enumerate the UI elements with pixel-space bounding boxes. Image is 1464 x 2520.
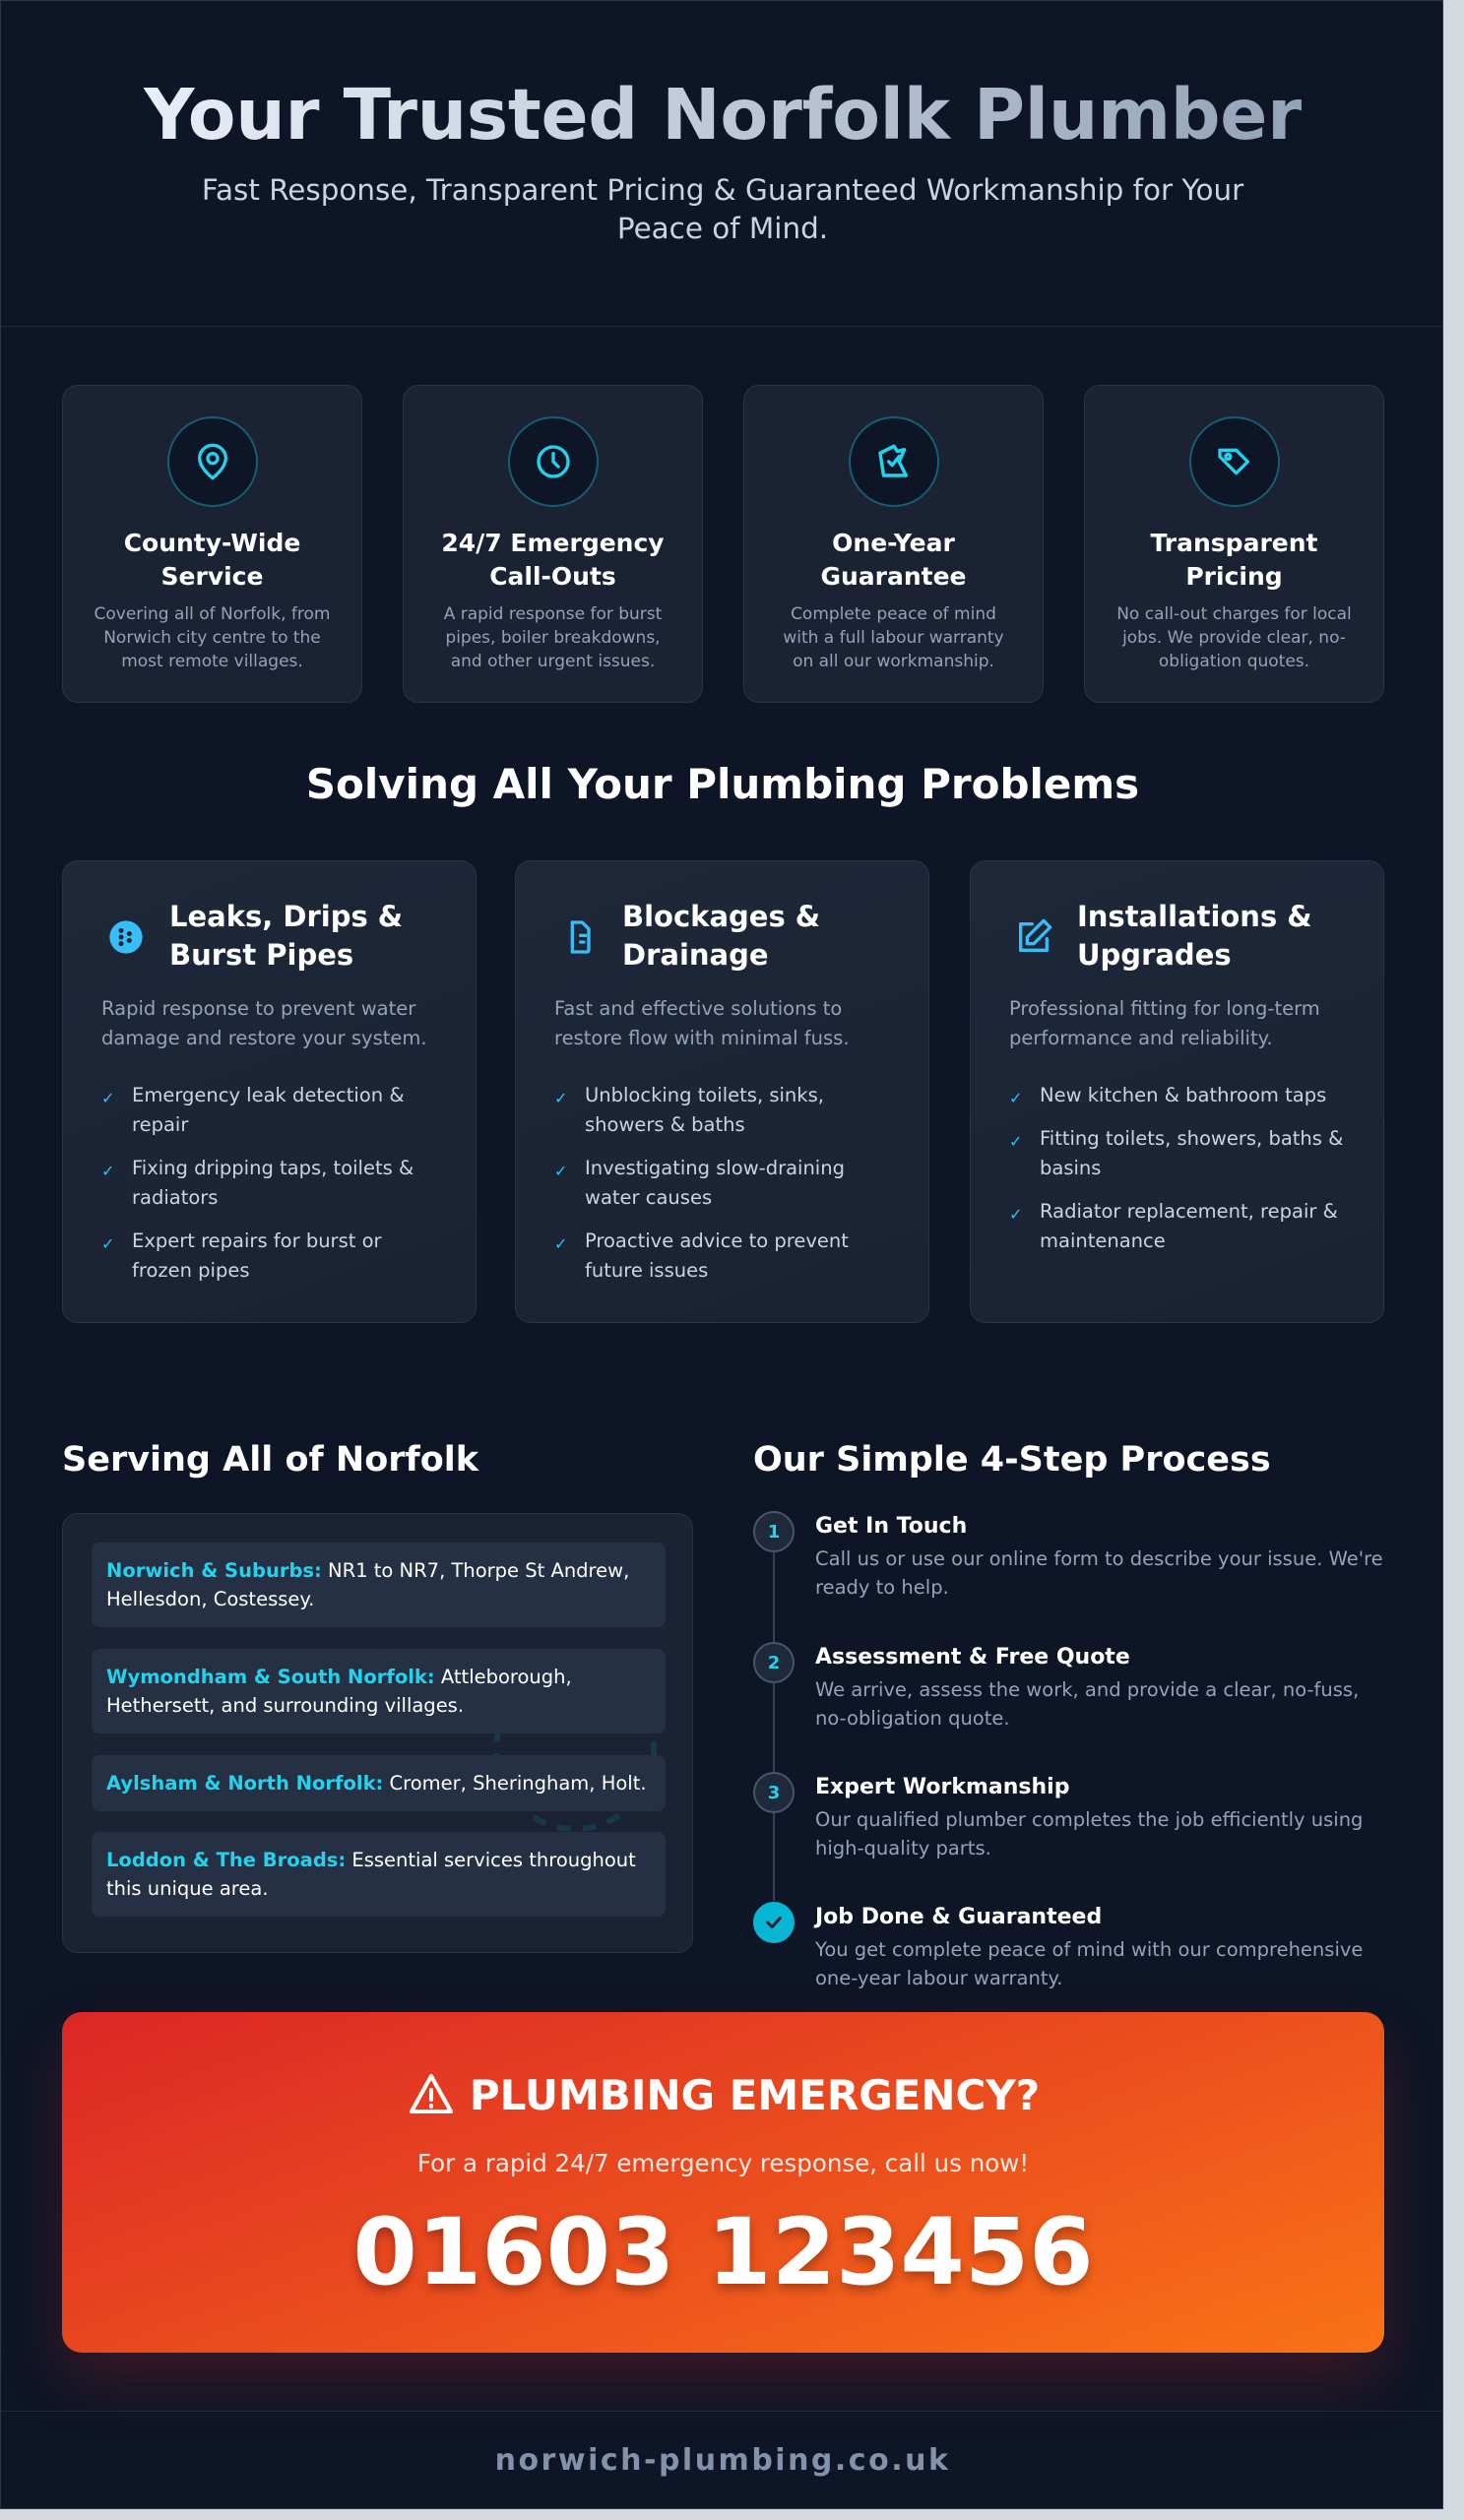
panel: blockages: Unblocking toilets, sinks, showers & baths bbox=[585, 1084, 824, 1136]
text: Job Done & Guaranteed bbox=[815, 1905, 1102, 1929]
area: wymondham: Wymondham & South Norfolk: Attleborough, Hethersett, and surrounding villages. bbox=[106, 1666, 572, 1717]
icon: tag bbox=[1189, 416, 1280, 507]
feature card: county-wide: County-Wide Service bbox=[124, 529, 300, 591]
text: You get complete peace of mind with our comprehensive one-year labour warranty. bbox=[815, 1938, 1363, 1989]
panel: installations: Installations & Upgrades bbox=[1077, 900, 1312, 972]
icon: leak bbox=[109, 920, 143, 954]
step 2 bbox=[753, 1642, 795, 1683]
emergency banner bbox=[62, 2012, 1384, 2353]
icon: edit bbox=[1019, 919, 1051, 952]
step 3: 3 bbox=[768, 1782, 780, 1803]
section heading: problems: Solving All Your Plumbing Problems bbox=[306, 760, 1139, 808]
panel: leaks bbox=[62, 860, 477, 1323]
feature card: guarantee bbox=[743, 385, 1044, 703]
step 3 bbox=[753, 1772, 795, 1813]
feature card: county-wide: Covering all of Norfolk, from Norwich city centre to the most remote villages. bbox=[95, 604, 330, 671]
feature card: guarantee: One-Year Guarantee bbox=[820, 529, 967, 591]
panel: installations bbox=[970, 860, 1384, 1323]
step 4 bbox=[753, 1902, 795, 1943]
subtitle: Fast Response, Transparent Pricing & Guaranteed Workmanship for Your Peace of Mind. bbox=[202, 173, 1243, 245]
panel: leaks: Expert repairs for burst or frozen pipes bbox=[132, 1229, 382, 1282]
heading: process: Our Simple 4-Step Process bbox=[753, 1440, 1271, 1480]
feature card: pricing bbox=[1084, 385, 1384, 703]
icon: document bbox=[571, 920, 591, 954]
phone number: 01603 123456 bbox=[352, 2199, 1094, 2306]
feature card: county-wide bbox=[62, 385, 362, 703]
heading with warning icon: PLUMBING EMERGENCY? bbox=[470, 2071, 1040, 2119]
panel: blockages bbox=[515, 860, 929, 1323]
panel: leaks: Emergency leak detection & repair bbox=[132, 1084, 405, 1136]
sub text: For a rapid 24/7 emergency response, call us now! bbox=[417, 2149, 1029, 2177]
panel: blockages: Investigating slow-draining water causes bbox=[585, 1157, 845, 1209]
panel: installations: Professional fitting for long-term performance and reliability. bbox=[1009, 997, 1320, 1049]
text: Expert Workmanship bbox=[815, 1775, 1069, 1799]
panel: installations: New kitchen & bathroom taps bbox=[1040, 1084, 1326, 1106]
area: norwich: Norwich & Suburbs: NR1 to NR7, Thorpe St Andrew, Hellesdon, Costessey. bbox=[106, 1559, 629, 1610]
feature card: guarantee: Complete peace of mind with a full labour warranty on all our workmanship. bbox=[783, 604, 1004, 671]
panel: blockages: Proactive advice to prevent future issues bbox=[585, 1229, 849, 1282]
text: Call us or use our online form to describe your issue. We're ready to help. bbox=[815, 1547, 1383, 1599]
panel: blockages: Blockages & Drainage bbox=[622, 900, 820, 972]
text: Our qualified plumber completes the job efficiently using high-quality parts. bbox=[815, 1808, 1363, 1859]
text: Get In Touch bbox=[815, 1514, 967, 1539]
panel: leaks: Rapid response to prevent water damage and restore your system. bbox=[101, 997, 427, 1049]
panel: leaks: Leaks, Drips & Burst Pipes bbox=[169, 900, 403, 972]
icon: badge check bbox=[849, 416, 939, 507]
area: norwich bbox=[92, 1543, 666, 1627]
area: loddon bbox=[92, 1832, 666, 1917]
step 1: 1 bbox=[768, 1522, 780, 1542]
title: Your Trusted Norfolk Plumber bbox=[144, 74, 1302, 156]
area: loddon: Loddon & The Broads: Essential services throughout this unique area. bbox=[106, 1849, 636, 1900]
heading: serving: Serving All of Norfolk bbox=[62, 1440, 478, 1480]
area: aylsham bbox=[92, 1755, 666, 1811]
panel: blockages: Fast and effective solutions to restore flow with minimal fuss. bbox=[554, 997, 850, 1049]
icon: map pin bbox=[167, 416, 258, 507]
panel: installations: Fitting toilets, showers, baths & basins bbox=[1040, 1127, 1343, 1179]
text: We arrive, assess the work, and provide a clear, no-fuss, no-obligation quote. bbox=[815, 1678, 1359, 1730]
feature card: pricing: No call-out charges for local jobs. We provide clear, no-obligation quotes. bbox=[1116, 604, 1352, 671]
area: wymondham bbox=[92, 1649, 666, 1733]
step 2: 2 bbox=[768, 1652, 780, 1673]
panel: leaks: Fixing dripping taps, toilets & radiators bbox=[132, 1157, 414, 1209]
panel: installations: Radiator replacement, repair & maintenance bbox=[1040, 1200, 1338, 1252]
feature card: 24/7 bbox=[403, 385, 703, 703]
feature card: 24/7: A rapid response for burst pipes, boiler breakdowns, and other urgent issues. bbox=[444, 604, 662, 671]
footer url: norwich-plumbing.co.uk bbox=[495, 2443, 950, 2478]
panel: service areas bbox=[62, 1513, 693, 1953]
feature card: pricing: Transparent Pricing bbox=[1150, 529, 1317, 591]
icon: clock bbox=[508, 416, 599, 507]
area: aylsham: Aylsham & North Norfolk: Cromer, Sheringham, Holt. bbox=[106, 1772, 647, 1795]
step 1 bbox=[753, 1511, 795, 1552]
text: Assessment & Free Quote bbox=[815, 1645, 1130, 1670]
feature card: 24/7: 24/7 Emergency Call-Outs bbox=[441, 529, 665, 591]
